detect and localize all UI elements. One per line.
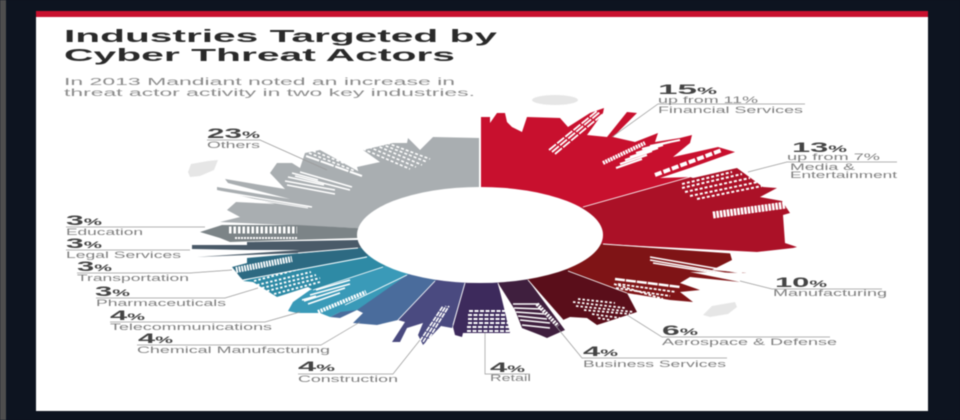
label: Media and Entertainment: 13 % [792,139,847,155]
icon: clouds [188,95,737,317]
sector: Others [217,137,480,235]
sector: Transportation [232,235,480,280]
intro text [64,77,475,99]
intro text: threat actor activity in two key industries. [64,88,475,99]
sector: Business Services [481,235,565,338]
label: Financial Services: up from 11% [658,95,758,105]
sector: Retail [453,235,511,337]
sector: Pharmaceuticals [243,235,480,297]
label: Pharmaceuticals: 3 % [95,283,130,299]
label: Construction [298,358,398,384]
title [64,26,498,65]
label: Education [66,212,143,237]
sector: Education [200,225,480,242]
label: Retail: Retail [490,373,531,383]
red top bar [36,11,928,17]
donut hole [357,187,603,283]
label: Others: 23 % [207,125,260,141]
label: Media and Entertainment: Entertainment [790,170,898,180]
sector: Telecommunications [288,235,480,317]
intro text: In 2013 Mandiant noted an increase in [64,77,455,88]
label: Transportation: Transportation [77,273,189,283]
sector dividers [243,117,732,325]
label: Pharmaceuticals: Pharmaceuticals [96,298,227,308]
label: Transportation [77,258,189,283]
title: Industries Targeted by [64,26,498,46]
title: Cyber Threat Actors [64,45,456,65]
label: Financial Services: 15 % [658,81,717,97]
label: Others [207,125,261,150]
sector: Legal Services [192,235,480,257]
label: Telecommunications [110,307,273,332]
label: Aerospace and Defense: 6 % [662,322,698,338]
label: Aerospace and Defense: Aerospace & Defense [662,337,837,347]
label: Manufacturing: Manufacturing [773,288,887,298]
label: Chemical Manufacturing: 4 % [138,330,173,346]
label: Business Services: 4 % [583,343,618,359]
label: Transportation: 3 % [77,258,112,274]
label: Media and Entertainment: up from 7% [787,152,880,162]
sector: Manufacturing [481,235,747,302]
label: Retail [490,359,531,383]
label: Construction: 4 % [298,358,335,374]
label: Business Services [583,343,727,369]
sector: Chemical Manufacturing [330,235,480,325]
label: Financial Services [658,81,804,115]
label: Telecommunications: Telecommunications [110,322,273,332]
label: Media and Entertainment [787,139,898,180]
label: Manufacturing [773,274,887,298]
label: Financial Services: Financial Services [658,105,804,115]
label: Others: Others [207,140,261,150]
chart: radial skyline [192,108,797,345]
label: Chemical Manufacturing: Chemical Manufacturing [137,345,330,355]
label: Pharmaceuticals [95,283,227,308]
label: Business Services: Business Services [583,359,727,369]
label: Chemical Manufacturing [137,330,330,355]
label: Construction: Construction [298,374,398,384]
label: Retail: 4 % [490,359,525,375]
label: Manufacturing: 10 % [775,274,827,290]
leader lines [66,104,897,374]
label: Legal Services [66,235,182,260]
label: Education: Education [66,227,143,237]
sector: Media and Entertainment [481,168,797,252]
sector: Construction [392,235,480,345]
label: Education: 3 % [66,212,102,228]
label: Media and Entertainment: Media & [790,162,855,172]
label: Legal Services: 3 % [66,235,102,251]
label: Aerospace and Defense [662,322,837,347]
label: Legal Services: Legal Services [66,250,182,260]
sector: Aerospace and Defense [481,235,637,325]
label: Telecommunications: 4 % [110,307,145,323]
sector: Financial Services [481,108,735,235]
